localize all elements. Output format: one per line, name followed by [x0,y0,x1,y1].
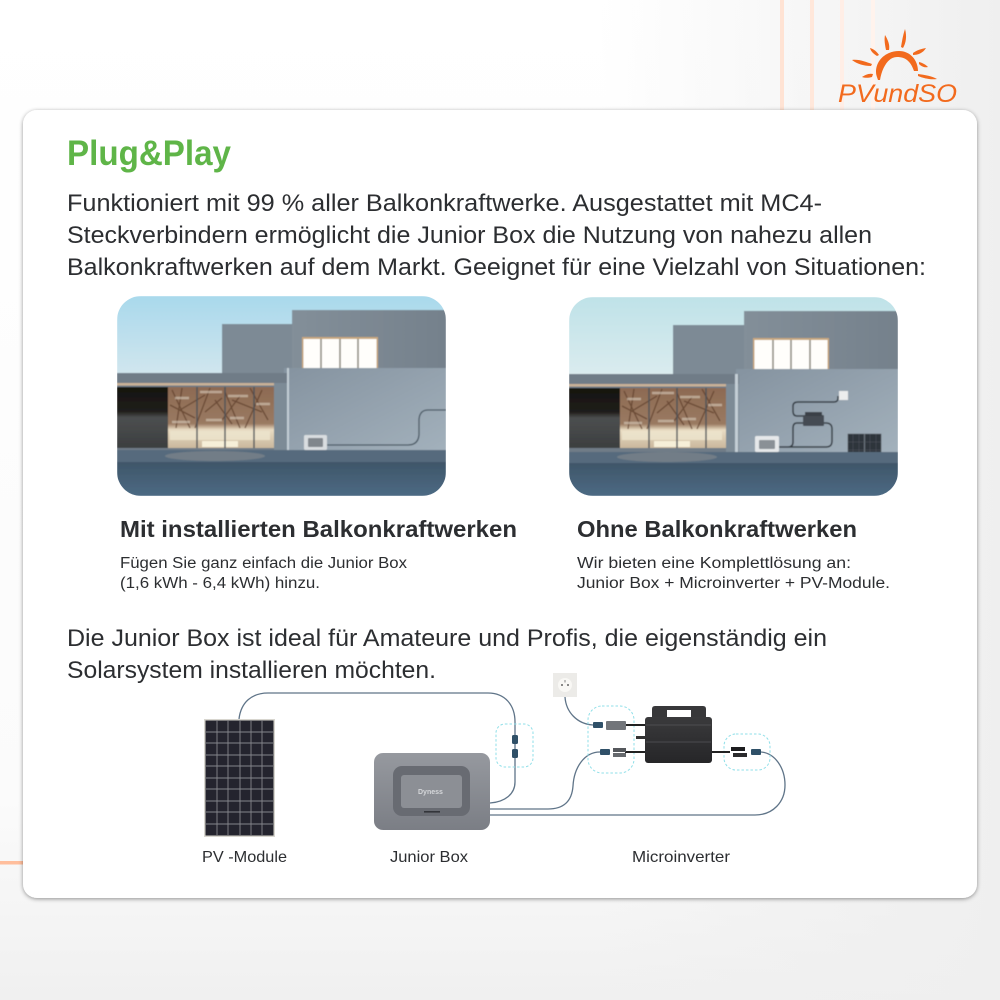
left option text: Fügen Sie ganz einfach die Junior Box [120,555,407,572]
intro text block: Funktioniert mit 99 % aller Balkonkraftwerke. Ausgestattet mit MC4- [67,190,822,217]
right option text: Junior Box + Microinverter + PV-Module. [577,575,890,592]
icon: PV module [204,719,275,837]
photo: house with complete solution [569,297,898,496]
heading: Plug&Play: Plug&Play [67,134,232,173]
closing text block [67,625,827,684]
cables [239,693,785,815]
icon: MC4 connectors [512,722,761,758]
label: Microinverter: Microinverter [632,849,731,866]
intro text block: Balkonkraftwerken auf dem Markt. Geeignet für eine Vielzahl von Situationen: [67,254,926,281]
icon: wall socket [553,673,577,697]
photo: house with installed balcony power plant [117,296,446,496]
intro text block [67,190,926,281]
intro text block: Steckverbindern ermöglicht die Junior Box die Nutzung von nahezu allen [67,222,872,249]
left option text: (1,6 kWh - 6,4 kWh) hinzu. [120,575,320,592]
closing text block: Die Junior Box ist ideal für Amateure und Profis, die eigenständig ein [67,625,827,652]
left option text [120,516,517,592]
label: Junior Box: Junior Box [390,849,468,866]
closing text block: Solarsystem installieren möchten. [67,657,436,684]
right option text: Ohne Balkonkraftwerken [577,516,857,542]
logo wordmark: PVundSO [838,80,957,108]
wiring diagram [204,673,785,837]
right option text: Wir bieten eine Komplettlösung an: [577,555,851,572]
main card [23,110,977,898]
left option text: Mit installierten Balkonkraftwerken [120,516,517,542]
label: PV-Module: PV -Module [202,849,287,866]
icon: sun [852,29,937,80]
icon: Junior Box [374,753,490,830]
dashed highlight boxes [496,706,770,773]
logo: PVundSO [838,29,957,108]
right option text [577,516,890,592]
icon: Junior Box: Dyness [418,789,443,796]
icon: microinverter [606,706,747,763]
